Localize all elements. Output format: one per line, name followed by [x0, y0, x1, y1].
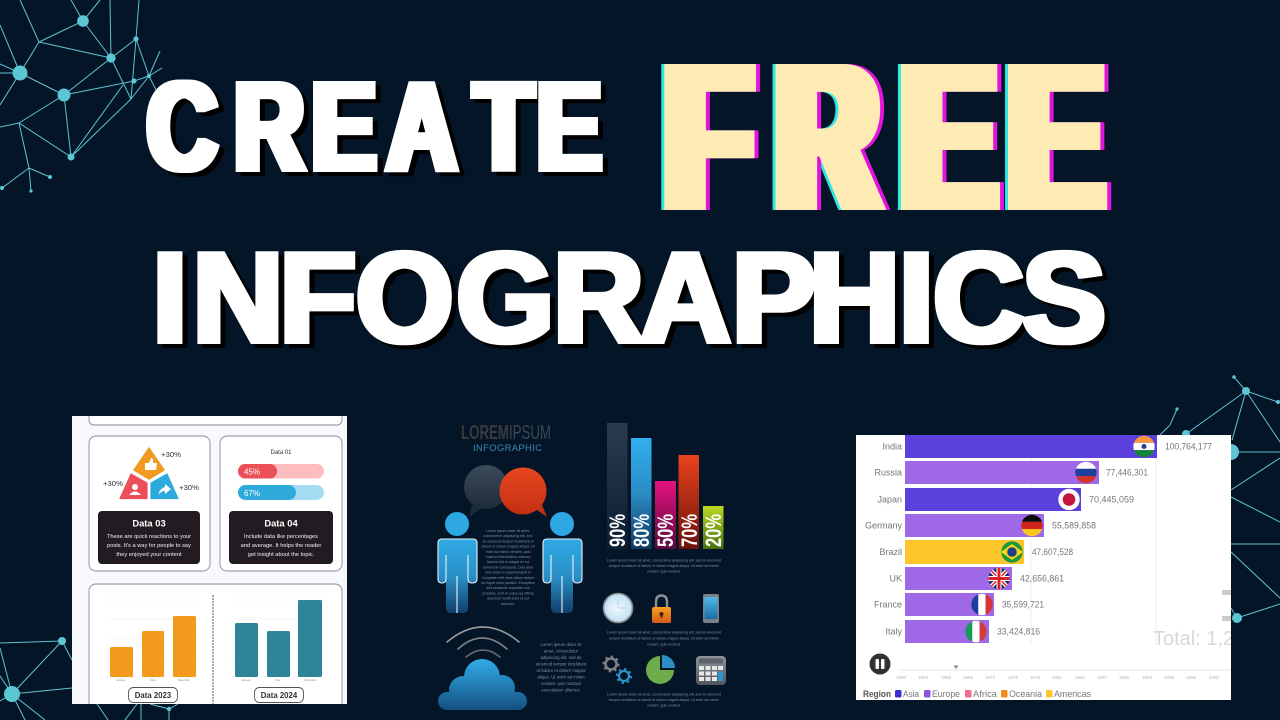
text block: center column: sint occaecat cupidatat non [486, 586, 530, 590]
triangle chart: +30% [161, 450, 181, 459]
bar: Germany: 55,589,858 [1052, 520, 1096, 530]
timeline axis: 1975 [1008, 675, 1019, 680]
text box: Data 04: and average. It helps the reader [241, 543, 321, 549]
text block: under bars: veniam, quis nostrud. [647, 570, 681, 574]
card: bar charts [88, 584, 342, 704]
text box: Data 04: Include data like percentages [244, 534, 318, 540]
triangle chart [103, 448, 199, 498]
bar chart: percentages: 50% [653, 514, 678, 547]
bar: Japan: Japan [877, 494, 902, 504]
heading: Lorem Ipsum Infographic: LOREMIPSUM [461, 422, 551, 444]
text block: center column: eu fugiat nulla pariatur. Excepteur [481, 581, 536, 585]
text block: center column: voluptate velit esse cillum dolore [482, 576, 534, 580]
chart: Data 2023: May [151, 678, 156, 682]
chart: Data 2024: January [241, 678, 251, 682]
person: left [438, 512, 477, 613]
icon: pause button [870, 654, 890, 674]
chart: Data 2024: May [276, 678, 281, 682]
person: right [543, 512, 582, 613]
bar chart: percentages: 90% [605, 514, 630, 547]
bar: Brazil [879, 540, 1073, 564]
timeline axis: 1993 [1142, 675, 1153, 680]
text block: center column: do eiusmod tempor incididunt ut [483, 539, 533, 543]
text block: under bars: tempor incididunt ut labore et dolore magna aliqua. Ut enim ad minim [609, 564, 719, 568]
bar: France: 35,599,721 [1002, 600, 1044, 610]
chart: Data 2023 [110, 616, 196, 702]
text block: center column: laborum. [501, 602, 515, 606]
text block: cloud description: adipiscing elit, sed do [540, 655, 582, 660]
timeline axis: 1996 [1164, 675, 1175, 680]
chart: Data 2024 [235, 600, 322, 702]
text block: center column: deserunt mollit anim id est [487, 597, 529, 601]
text block: under bars: Lorem ipsum dolor sit amet, consectetur adipiscing elit, sed do eiusmod [607, 558, 721, 562]
chart: Data 2023: January [116, 678, 126, 682]
text block: cloud description: veniam, quis nostrud [541, 681, 581, 686]
text box: Data 03: These are quick reactions to your [107, 534, 191, 540]
bar: Russia [874, 461, 1148, 484]
icon: clock [604, 594, 632, 622]
icon: calculator [696, 656, 726, 685]
title: CREATE: CREATE [147, 55, 601, 197]
text block: cloud description: Lorem ipsum dolor sit [540, 642, 582, 647]
text block: cloud description: eiusmod tempor incididunt [536, 662, 587, 666]
network decoration: right [1160, 375, 1280, 623]
title: INFOGRAPHICS: INFOGRAPHICS [152, 227, 1106, 370]
progress bar 67%: 67% [244, 489, 260, 498]
text box: Data 04 [229, 511, 333, 564]
legend: region: Africa [973, 689, 997, 699]
bar: Germany [865, 514, 1096, 537]
text block: center column: labore et dolore magna aliqua. Ut [481, 545, 535, 549]
text block: cloud description: amet, consectetur [544, 648, 579, 654]
bar: Japan: 70,445,059 [1089, 494, 1134, 504]
bar: Italy [885, 620, 1040, 643]
bar: India: 100,764,177 [1165, 442, 1212, 452]
text box: Data 03: they enjoyed your content [116, 552, 182, 558]
bar chart: percentages: 70% [677, 514, 702, 547]
bar: Germany: Germany [865, 520, 902, 530]
timeline axis: 1999 [1186, 675, 1197, 680]
text block: center column: proident, sunt in culpa qui officia [482, 591, 534, 595]
card: Data 03 [89, 436, 210, 571]
text block: under icons row one [607, 630, 721, 646]
text block: cloud description: ut labore et dolore magna [537, 668, 586, 673]
legend: region: Americas [1054, 689, 1091, 699]
icon: smartphone [703, 594, 719, 623]
bar: Italy: Italy [885, 626, 902, 636]
text block: center column: commodo consequat. Duis aute [483, 565, 533, 569]
title: FREE: FREE [666, 23, 1102, 252]
text block: under icons row two: veniam, quis nostrud. [647, 704, 681, 708]
network decoration: bottom left [0, 637, 178, 720]
legend: region: Oceania [1009, 689, 1042, 699]
text block: center column [481, 529, 536, 606]
text block: center column: nostrud exercitation ullamco [486, 555, 530, 559]
triangle chart: +30% [179, 483, 199, 492]
text box: Data 03: posts. It's a way for people to say [107, 543, 191, 549]
card: Data 04: Data 01 [270, 450, 292, 456]
text block: under bars [607, 558, 721, 574]
bar: Russia: 77,446,301 [1106, 468, 1148, 478]
icon: cloud [438, 659, 527, 710]
heading: Lorem Ipsum Infographic: INFOGRAPHIC [473, 443, 542, 454]
text block: under icons row one: veniam, quis nostrud. [647, 642, 681, 646]
timeline axis: 1969 [963, 675, 974, 680]
heading: Lorem Ipsum Infographic [461, 422, 551, 454]
text block: under icons row one: Lorem ipsum dolor sit amet, consectetur adipiscing elit, sed do eiusmod [607, 630, 721, 634]
bar: France [874, 593, 1044, 616]
text block: under icons row two: Lorem ipsum dolor sit amet, consectetur adipiscing elit, sed do eiusmod [607, 692, 721, 696]
icon: wifi arcs [447, 627, 519, 657]
text block: cloud description [536, 642, 587, 692]
bar: India [882, 435, 1212, 458]
total counter: Total: 1,2 [1153, 628, 1234, 650]
speech bubbles [464, 465, 547, 517]
bar: UK [889, 567, 1064, 590]
timeline axis: 2002 [1209, 675, 1220, 680]
timeline axis: 1960 [896, 675, 907, 680]
timeline axis: 1984 [1075, 675, 1086, 680]
timeline axis: 1978 [1030, 675, 1041, 680]
bar chart: percentages: 20% [701, 514, 726, 547]
timeline axis: 1981 [1052, 675, 1063, 680]
bar: India: India [882, 442, 902, 452]
bar: Russia: Russia [874, 468, 902, 478]
timeline axis: 1963 [918, 675, 929, 680]
text block: center column: irure dolor in reprehenderit in [485, 571, 531, 575]
text block: center column: laboris nisi ut aliquip ex ea [487, 560, 529, 564]
icon: gears [604, 656, 631, 683]
legend: region: Asia [903, 689, 919, 699]
bar: Brazil: 47,607,528 [1032, 547, 1073, 557]
text block: under icons row one: tempor incididunt ut labore et dolore magna aliqua. Ut enim ad minim [609, 636, 719, 640]
progress bar 45%: 45% [244, 468, 260, 476]
text block: under icons row two: tempor incididunt ut labore et dolore magna aliqua. Ut enim ad minim [609, 698, 719, 702]
text block: cloud description: aliqua. Ut enim ad minim [537, 674, 585, 680]
text box: Data 03 [98, 511, 200, 564]
text box: Data 03: Data 03 [132, 518, 166, 528]
bar: France: France [874, 600, 902, 610]
panel: lorem ipsum infographic [438, 422, 726, 710]
bar chart: percentages [605, 423, 726, 549]
timeline axis [896, 666, 1231, 680]
chart: Data 2024: December [304, 678, 316, 682]
legend: region: Europe [932, 689, 960, 699]
text box: Data 04: get insight about the topic. [248, 552, 315, 558]
text box: Data 04: Data 04 [264, 518, 298, 528]
bar: UK: UK [889, 574, 902, 584]
bar: UK: 42,656,861 [1020, 574, 1064, 584]
card: Data 04 [220, 436, 342, 571]
bar chart: percentages: 80% [629, 514, 654, 547]
text block: center column: Lorem ipsum dolor sit amet, [486, 529, 530, 533]
panel: social media infographic [72, 400, 347, 720]
text block: center column: enim ad minim veniam, quis [486, 550, 530, 554]
icon: padlock [652, 596, 671, 623]
bar: Brazil: Brazil [879, 547, 902, 557]
legend: region [864, 690, 1091, 699]
timeline axis: 1990 [1119, 675, 1130, 680]
timeline axis: 1966 [941, 675, 952, 680]
timeline axis: 1987 [1097, 675, 1108, 680]
icon: pie chart [646, 655, 675, 684]
network decoration: top left [0, 0, 162, 193]
panel: bar chart race [856, 435, 1234, 700]
chart: Data 2023: Data 2023 [135, 691, 172, 700]
legend: region: Region [863, 689, 891, 699]
timeline axis: 1972 [985, 675, 996, 680]
text block: under icons row two [607, 692, 721, 708]
chart: Data 2024: Data 2024 [261, 691, 298, 700]
bar: Japan [877, 488, 1134, 511]
bar: Italy: 33,424,816 [997, 626, 1040, 636]
text block: cloud description: exercitation ullamco. [541, 688, 581, 692]
triangle chart: +30% [103, 479, 123, 488]
text block: center column: consectetur adipiscing elit, sed [484, 534, 532, 538]
chart: Data 2023: December [178, 678, 190, 682]
